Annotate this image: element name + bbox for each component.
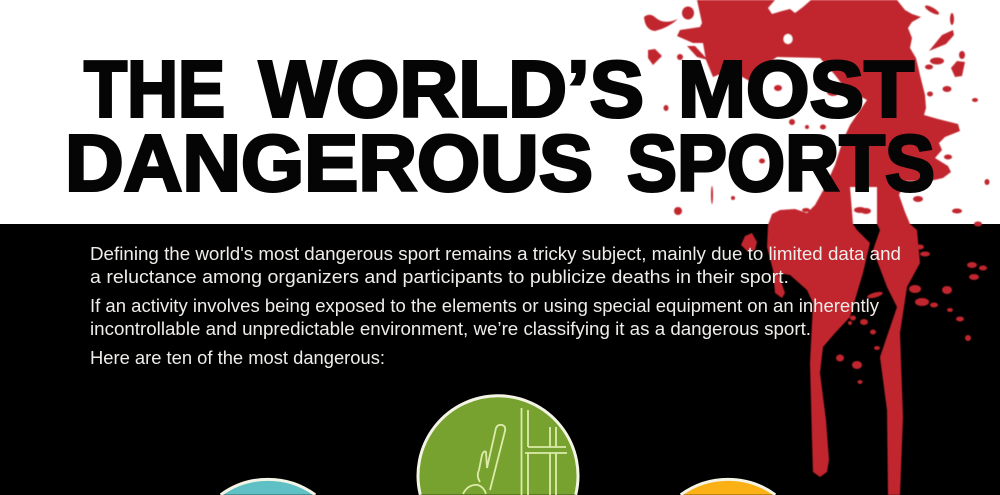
yellow sport circle: [681, 479, 775, 495]
title line 2: DANGEROUS: DANGEROUS: [65, 118, 593, 208]
intro line 4: incontrollable and unpredictable environment, we’re classifying it as a dangerous sport.: [90, 318, 811, 339]
teal sport circle: [221, 479, 315, 495]
white hole: [784, 34, 792, 44]
icon: athlete and bars: [463, 408, 567, 495]
green sport circle with gymnastics icon: [418, 396, 578, 495]
title line 1: MOST: MOST: [678, 44, 914, 134]
title line 2: SPORTS: SPORTS: [627, 118, 935, 208]
white header panel: [0, 0, 1000, 224]
splatter drops: [687, 46, 708, 60]
intro line 2: a reluctance among organizers and participants to publicize deaths in their sport.: [90, 266, 789, 287]
title line 1: THE: THE: [84, 44, 225, 134]
intro text: [90, 243, 901, 368]
intro line 5: Here are ten of the most dangerous:: [90, 347, 385, 368]
title line 1: WORLD'S: WORLD’S: [259, 44, 644, 134]
intro line 3: If an activity involves being exposed to the elements or using special equipment on an inherently: [90, 295, 880, 316]
blood splatter: [644, 0, 990, 495]
black body panel: [0, 224, 1000, 495]
specks on black: [916, 244, 924, 250]
intro line 1: Defining the world's most dangerous sport remains a tricky subject, mainly due to limited data and: [90, 243, 901, 264]
title: [65, 44, 935, 208]
